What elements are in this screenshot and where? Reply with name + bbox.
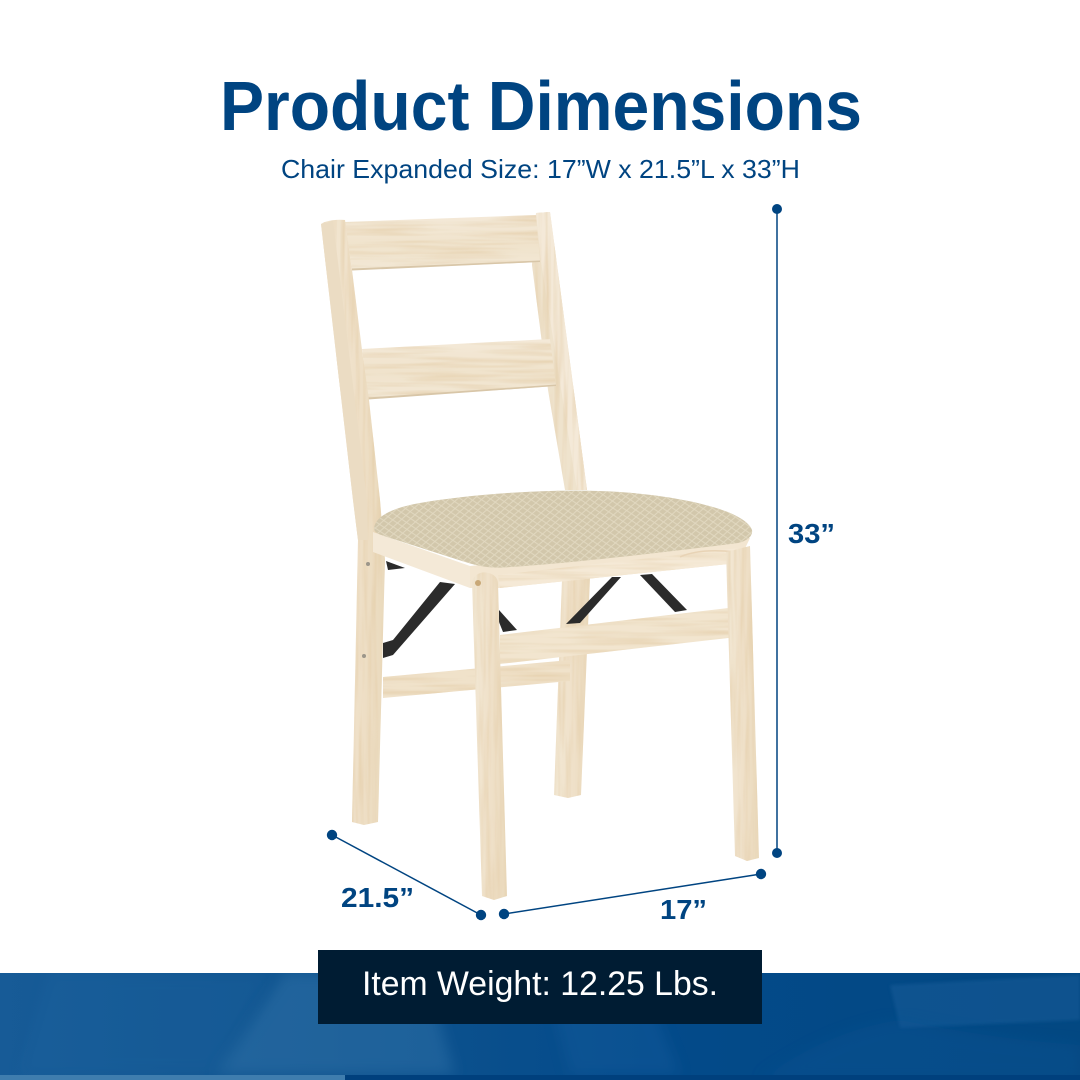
front right leg — [726, 546, 759, 861]
height dimension line: 33 inches — [772, 204, 782, 858]
width dimension line: 17 inches — [499, 869, 766, 919]
back right rail — [532, 212, 587, 490]
item weight panel — [318, 950, 762, 1024]
bottom blue band — [0, 973, 1080, 1080]
item weight text: Item Weight: 12.25 Lbs. — [362, 965, 718, 1003]
height label: 33” — [788, 518, 835, 549]
seat frame — [373, 532, 750, 588]
top back slat — [345, 215, 540, 270]
back right leg — [554, 578, 590, 798]
middle back slat — [362, 339, 556, 400]
subtitle: chair expanded size: Chair Expanded Size: 17”W x 21.5”L x 33”H — [281, 154, 800, 184]
front stretcher — [500, 607, 737, 664]
front left leg — [472, 572, 507, 900]
left back rail and rear leg — [321, 220, 385, 825]
depth label: 21.5” — [341, 882, 414, 913]
depth dimension line: 21.5 inches — [327, 830, 486, 920]
title: Product Dimensions — [220, 67, 862, 145]
metal folding brackets — [383, 561, 687, 658]
chair illustration — [321, 212, 759, 900]
side stretcher — [383, 660, 570, 698]
width label: 17” — [660, 894, 707, 925]
seat cushion — [374, 491, 752, 568]
